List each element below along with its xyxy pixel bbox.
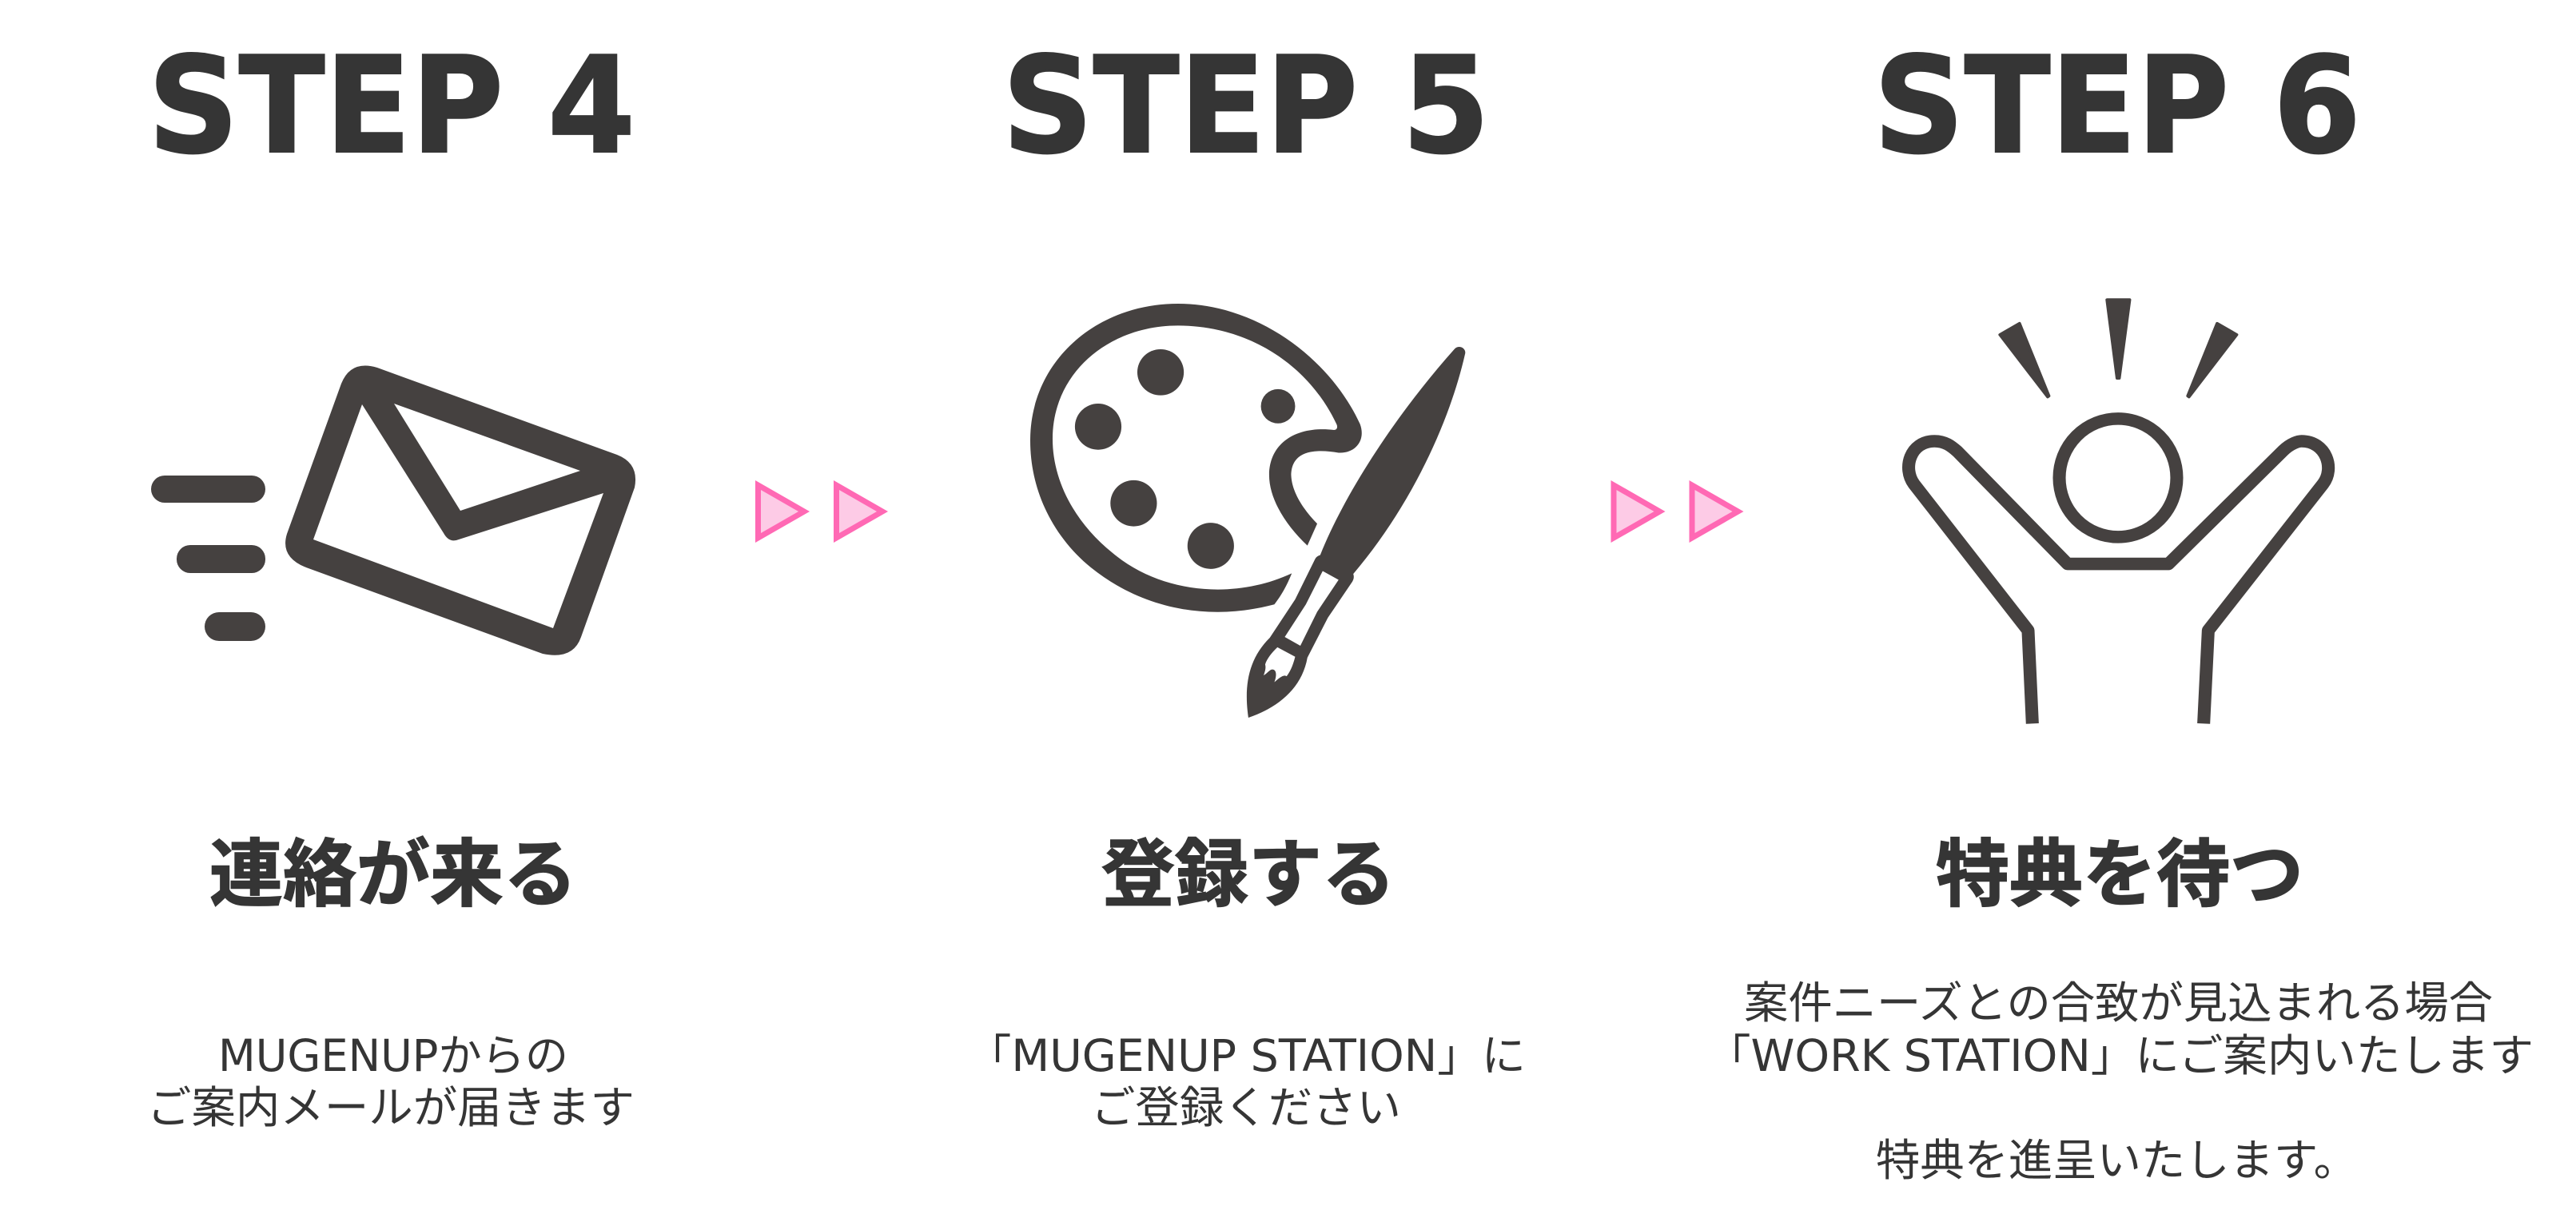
subheading: register: 登録する (1101, 834, 1395, 916)
body text: step 5 description (967, 1030, 1526, 1133)
head (2060, 419, 2176, 537)
heading: STEP 5: STEP 5 (1002, 29, 1490, 184)
body text: step 6 description (1706, 977, 2534, 1186)
envelope (285, 366, 635, 655)
body text: step 4 description (147, 1030, 635, 1133)
speed lines (151, 476, 265, 641)
body (1909, 441, 2328, 723)
body text: step 6 description: 「WORK STATION」にご案内いたします (1706, 1030, 2534, 1081)
body text: step 6 description: 特典を進呈いたします。 (1876, 1135, 2358, 1186)
body text: step 4 description: MUGENUPからの (218, 1030, 568, 1081)
body text: step 4 description: ご案内メールが届きます (147, 1082, 635, 1133)
icon: flying envelope (151, 366, 635, 655)
sparkle rays (2000, 300, 2236, 397)
heading: STEP 6: STEP 6 (1873, 29, 2361, 184)
palette (1030, 304, 1362, 612)
body text: step 6 description: 案件ニーズとの合致が見込まれる場合 (1744, 977, 2493, 1029)
subheading: wait for the benefit: 特典を待つ (1936, 834, 2303, 916)
icon: person cheering (1909, 300, 2328, 723)
panel: step 4 (147, 29, 635, 1133)
arrows: step 5 to step 6 (1614, 485, 1738, 538)
subheading: contact arrives: 連絡が来る (209, 834, 577, 916)
panel: step 5 (967, 29, 1526, 1133)
arrows: step 4 to step 5 (758, 485, 882, 538)
brush (1247, 347, 1465, 718)
body text: step 5 description: ご登録ください (1091, 1082, 1401, 1133)
body text: step 5 description: 「MUGENUP STATION」に (967, 1030, 1526, 1081)
icon: palette and brush (1030, 304, 1465, 718)
heading: STEP 4: STEP 4 (148, 29, 635, 184)
panel: step 6 (1706, 29, 2534, 1186)
